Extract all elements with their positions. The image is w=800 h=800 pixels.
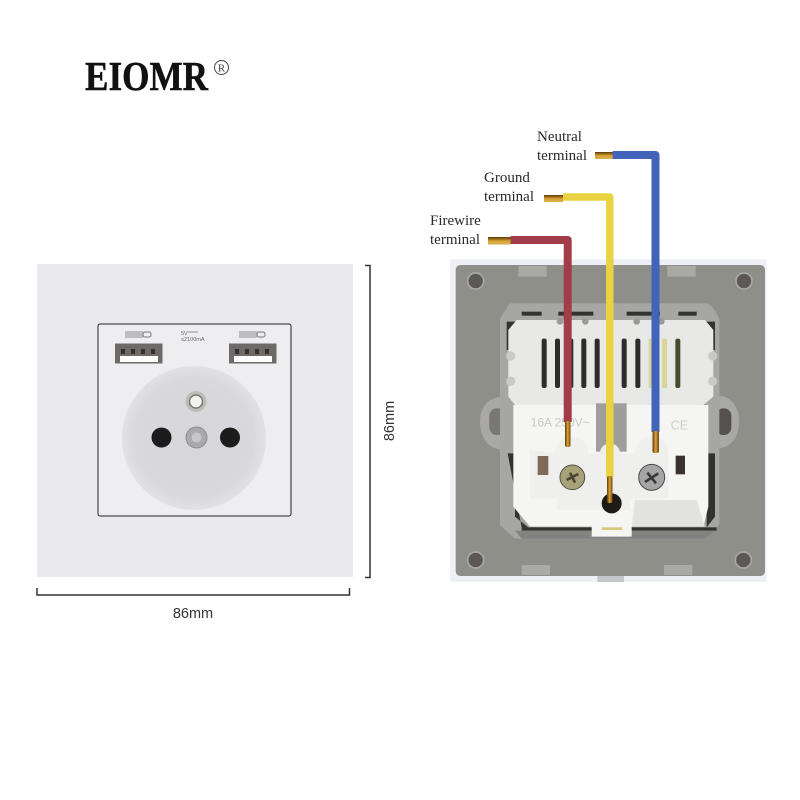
dimension: height: 86mm <box>382 401 398 441</box>
CE mark: CE <box>671 418 688 432</box>
label: firewire terminal: terminal <box>430 232 480 248</box>
live screw <box>560 465 585 490</box>
USB rating label: ≤2100mA <box>181 337 205 343</box>
logo: EIOMR: R <box>218 62 226 74</box>
panel: socket front view <box>37 264 353 577</box>
earth terminal hole <box>602 493 622 513</box>
USB port right <box>229 344 276 364</box>
USB symbol left <box>125 331 151 338</box>
label: ground terminal: Ground <box>484 170 530 186</box>
white frame <box>450 259 767 582</box>
earth pin <box>186 391 206 412</box>
wire: ground (yellow) <box>544 195 612 503</box>
corner screw holes <box>468 273 752 568</box>
label: neutral terminal: terminal <box>537 148 587 164</box>
dark gaps around module <box>507 312 717 531</box>
neutral screw <box>639 464 665 490</box>
rating text: 16A 250V~ <box>531 416 590 430</box>
plate clips <box>518 266 696 575</box>
neutral hole <box>220 428 240 448</box>
logo: EIOMR: EIOMR <box>85 53 208 99</box>
top cover with vents <box>506 318 717 405</box>
USB rating label <box>181 331 205 343</box>
centre screw <box>186 427 207 448</box>
grey back plate <box>456 265 765 576</box>
faceplate <box>37 264 353 577</box>
inner module <box>98 324 291 516</box>
terminal windows <box>538 456 548 475</box>
wire: neutral (blue) <box>595 152 659 453</box>
dimension: width <box>37 588 350 622</box>
label: ground terminal: terminal <box>484 189 534 205</box>
USB port left <box>115 344 162 364</box>
module housing <box>500 303 719 539</box>
dimension: height <box>365 266 398 578</box>
dimension: width: 86mm <box>173 606 213 622</box>
USB rating label: 5V <box>181 331 188 337</box>
French socket face <box>122 366 266 510</box>
live hole <box>152 428 172 448</box>
label: firewire terminal: Firewire <box>430 213 481 229</box>
USB symbol right <box>239 331 265 338</box>
panel: socket rear view <box>450 259 767 582</box>
terminal block <box>513 403 708 537</box>
wire: firewire (red) <box>488 237 570 447</box>
mounting ears <box>480 395 739 450</box>
label: neutral terminal: Neutral <box>537 129 582 145</box>
